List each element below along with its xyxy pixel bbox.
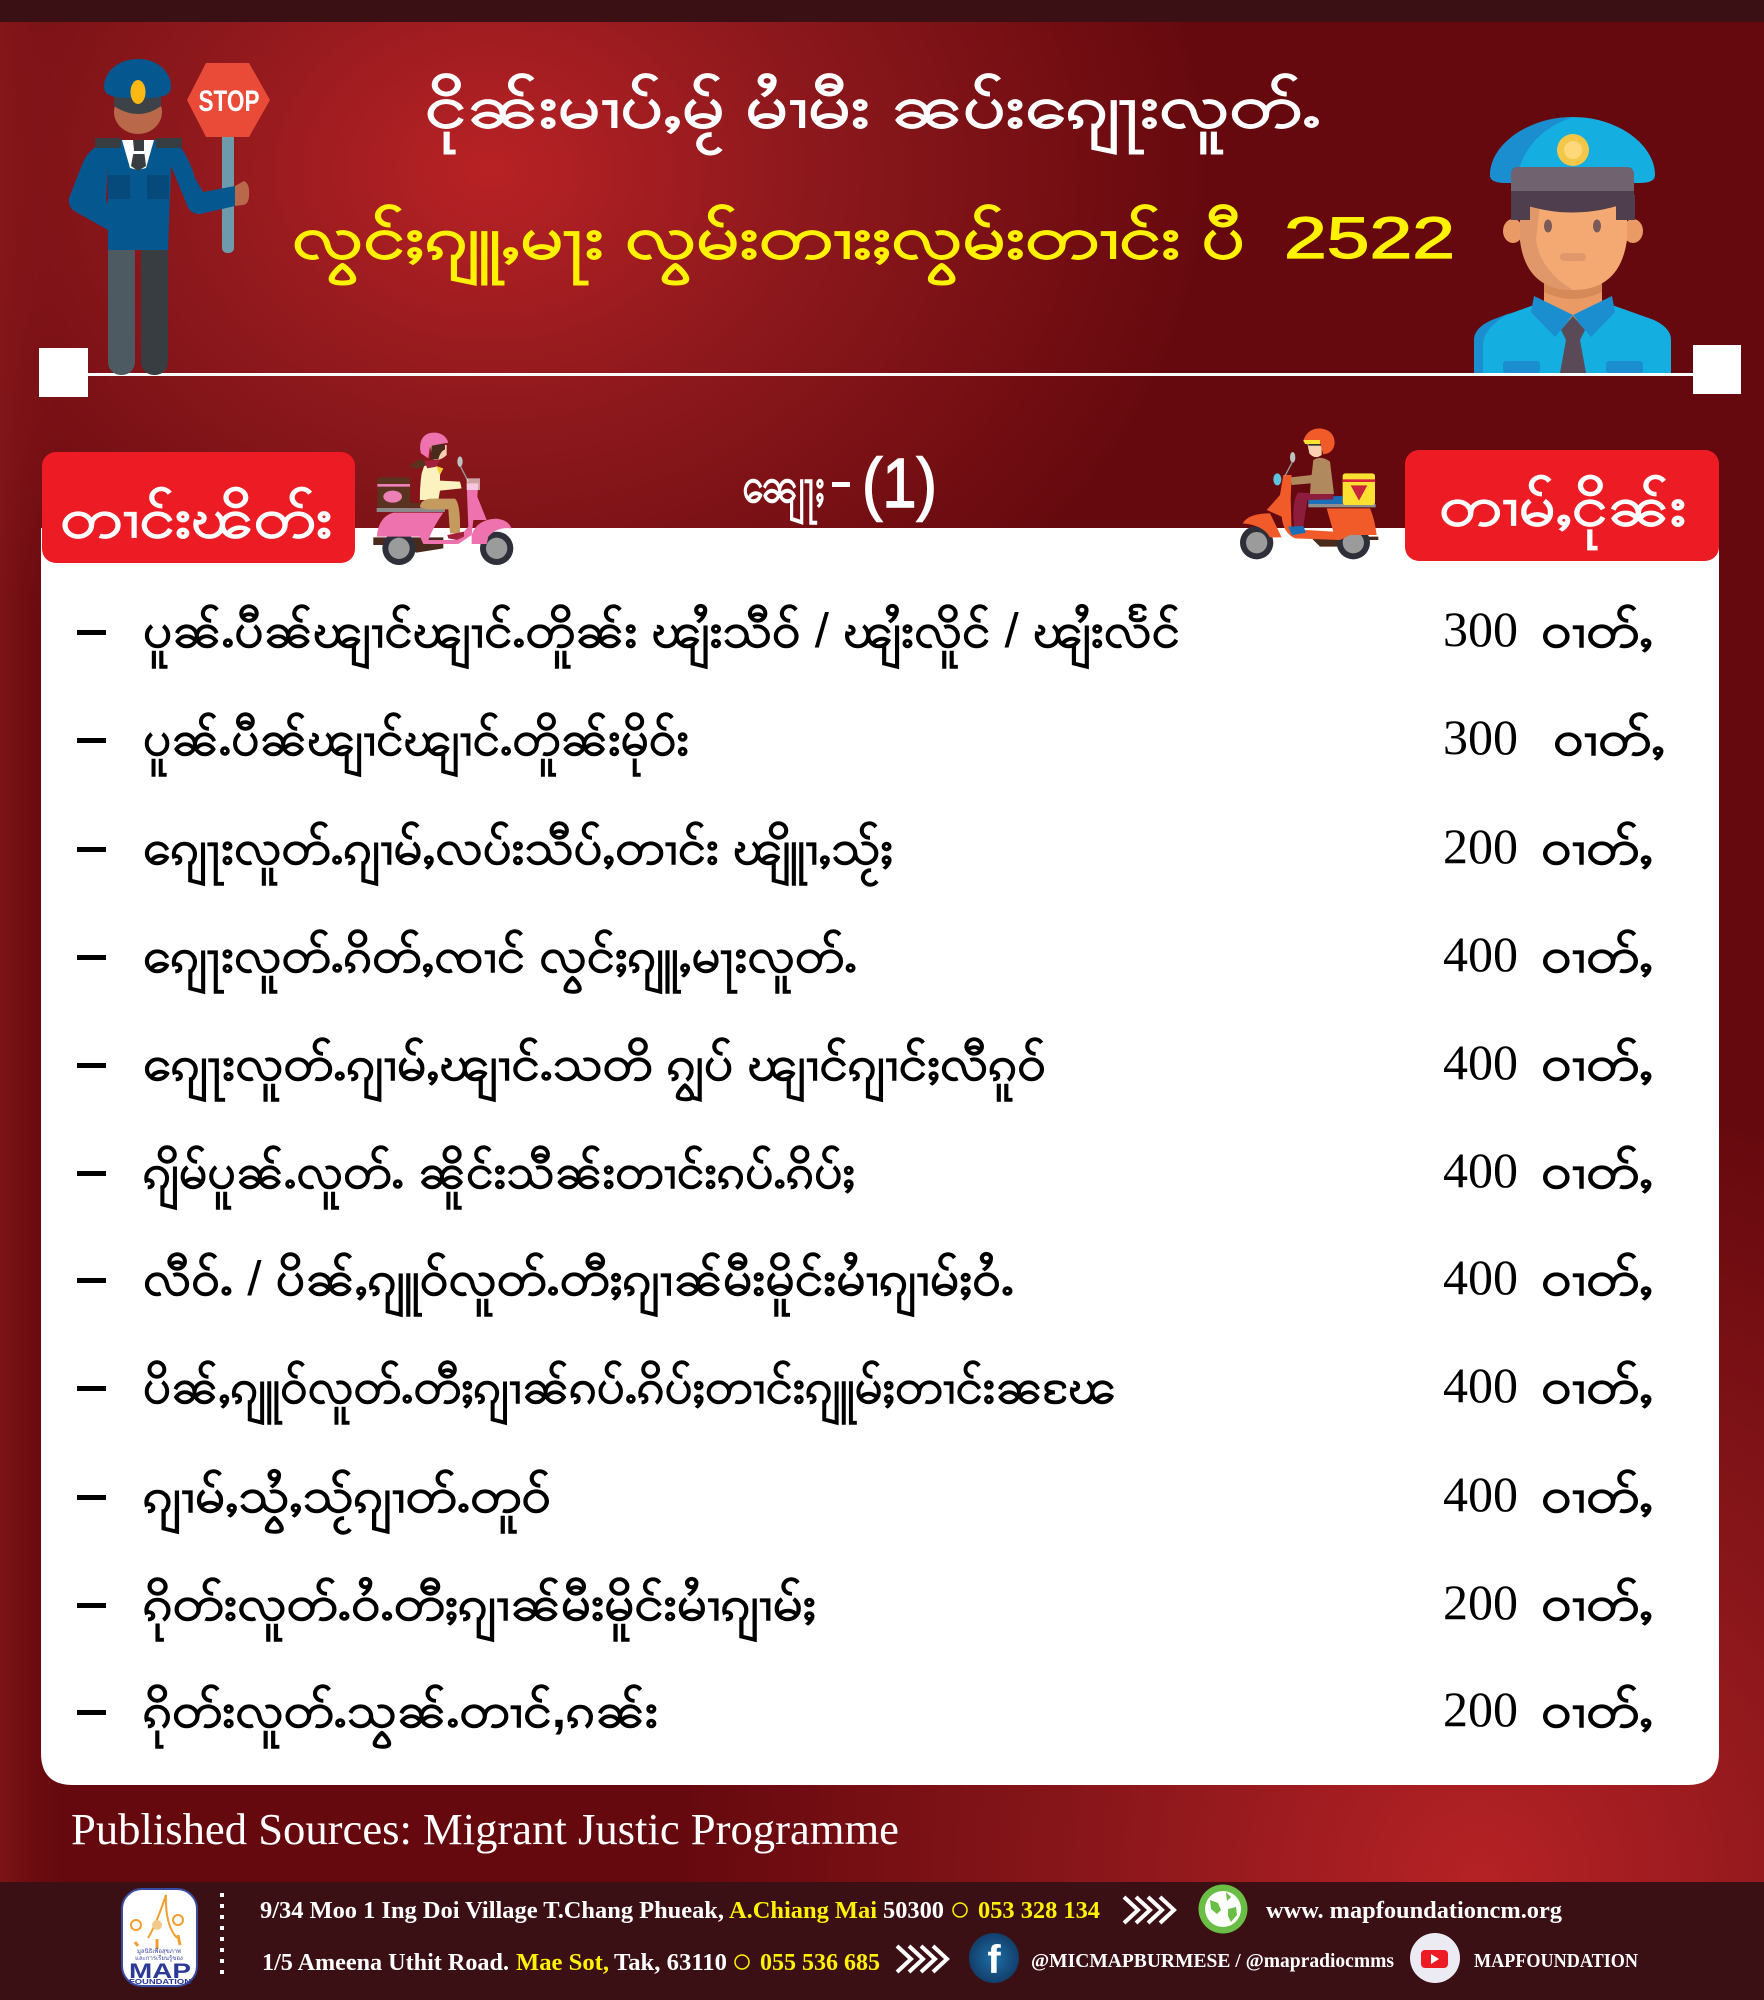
row 8: 400 bbox=[1443, 1357, 1518, 1413]
icon: MAP Foundation logo: มูลนิธิเพื่อสุขภาพ bbox=[137, 1947, 181, 1955]
row 5 bbox=[77, 1034, 1653, 1104]
row 9: ဝၢတ်ႇ bbox=[1541, 1467, 1653, 1523]
row 6: 400 bbox=[1443, 1142, 1518, 1198]
icon: MAP Foundation logo: MAP bbox=[129, 1960, 191, 1983]
address line 1: 9/34 Moo 1 Ing Doi Village T.Chang Phueak, bbox=[260, 1898, 724, 1924]
row 11: ၵိုတ်းလူတ်ႉသွၼ်ႉတၢင်,ၵၼ်း bbox=[143, 1682, 658, 1750]
icon: facebook bbox=[969, 1933, 1019, 1983]
footer band bbox=[0, 1882, 1764, 2000]
page number heading: ၼျေႃႈ bbox=[742, 457, 825, 526]
row 7: လီဝ်ႉ / ပိၼ်ႇၵျူဝ်လူတ်ႉတီႈၵျၢၼ်မီးမိူင်းမႆၢၵျၢမ်ႈဝႆႉ bbox=[143, 1250, 1014, 1318]
youtube channel: MAPFOUNDATION bbox=[1474, 1950, 1638, 1972]
row 4 bbox=[77, 926, 1653, 995]
row 1 bbox=[77, 601, 1653, 670]
website: www. mapfoundationcm.org bbox=[1266, 1898, 1562, 1924]
row 6 bbox=[77, 1142, 1653, 1211]
title line 2: လွင်ႈၵျူႇမႃး လွမ်းတၢးႈလွမ်းတၢင်း ပီ bbox=[292, 203, 1245, 286]
row 7: 400 bbox=[1443, 1249, 1518, 1305]
icon: facebook: f bbox=[987, 1938, 1001, 1982]
tab: offence heading: တၢင်းၽိတ်း bbox=[60, 486, 332, 549]
row 5: 400 bbox=[1443, 1034, 1518, 1090]
icon: pink delivery scooter bbox=[373, 433, 513, 565]
address line 1: 053 328 134 bbox=[978, 1898, 1100, 1924]
row 3: ဝၢတ်ႇ bbox=[1541, 819, 1653, 875]
icon: traffic officer with stop sign: STOP bbox=[198, 85, 260, 118]
row 10: ၵိုတ်းလူတ်ႉဝႆႉတီႈၵျၢၼ်မီးမိူင်းမႆၢၵျၢမ်ႈ bbox=[143, 1575, 816, 1643]
row 4: 400 bbox=[1443, 926, 1518, 982]
row 11: ဝၢတ်ႇ bbox=[1541, 1682, 1653, 1738]
row 7 bbox=[77, 1249, 1653, 1318]
page number heading: (1) bbox=[862, 444, 937, 522]
row 8: ပိၼ်ႇၵျူဝ်လူတ်ႉတီႈၵျၢၼ်ၵပ်ႉၵိပ်ႈတၢင်းၵျူမ်ႈတၢင်းၼၽႄ bbox=[143, 1358, 1116, 1426]
row 11: 200 bbox=[1443, 1681, 1518, 1737]
row 2 bbox=[77, 709, 1665, 778]
row 9: 400 bbox=[1443, 1466, 1518, 1522]
row 8: ဝၢတ်ႇ bbox=[1541, 1358, 1653, 1414]
address line 1: A.Chiang Mai bbox=[729, 1898, 877, 1924]
source note: Published Sources: Migrant Justic Programme bbox=[71, 1805, 899, 1854]
title line 2 bbox=[292, 203, 1455, 286]
row 6: ဝၢတ်ႇ bbox=[1541, 1143, 1653, 1199]
address line 2: 055 536 685 bbox=[760, 1950, 880, 1976]
icon: MAP Foundation logo: FOUNDATION bbox=[129, 1979, 191, 1986]
row 5: ဝၢတ်ႇ bbox=[1541, 1035, 1653, 1091]
icon: MAP Foundation logo bbox=[122, 1889, 197, 1986]
row 9 bbox=[77, 1466, 1653, 1535]
address line 2 bbox=[262, 1950, 880, 1976]
address line 2: Mae Sot, bbox=[516, 1950, 609, 1976]
row 3 bbox=[77, 818, 1653, 887]
row 1: ဝၢတ်ႇ bbox=[1541, 602, 1653, 658]
row 2: ဝၢတ်ႇ bbox=[1553, 710, 1665, 766]
row 3: ၵျေႃးလူတ်ႉၵျၢမ်ႇလပ်းသီပ်ႇတၢင်း ၽျိူၢႇသႂ်ႈ bbox=[143, 819, 893, 887]
tab: offence heading bbox=[42, 452, 355, 563]
row 2: ပူၼ်ႉပီၼ်ၽျၢင်ၽျၢင်ႉတိူၼ်းမိုဝ်း bbox=[143, 710, 689, 778]
icon: youtube bbox=[1410, 1933, 1460, 1983]
row 9: ၵျၢမ်ႇသွႆႇသႂ်ၵျၢတ်ႉတူဝ် bbox=[143, 1467, 551, 1535]
tab: fine amount heading: တၢမ်ႇငိုၼ်း bbox=[1439, 474, 1686, 550]
row 4: ဝၢတ်ႇ bbox=[1541, 927, 1653, 983]
row 10: ဝၢတ်ႇ bbox=[1541, 1575, 1653, 1631]
arrow: chevrons row 2 bbox=[897, 1946, 947, 1972]
row 8 bbox=[77, 1357, 1653, 1426]
row 1: 300 bbox=[1443, 601, 1518, 657]
row 10: 200 bbox=[1443, 1574, 1518, 1630]
facebook handles: @MICMAPBURMESE / @mapradiocmms bbox=[1031, 1950, 1394, 1972]
row 4: ၵျေႃးလူတ်ႉၵိတ်ႇၸၢင် လွင်ႈၵျူႇမႃးလူတ်ႉ bbox=[143, 927, 857, 995]
row 7: ဝၢတ်ႇ bbox=[1541, 1250, 1653, 1306]
icon: globe bbox=[1198, 1884, 1248, 1934]
tab: fine amount heading bbox=[1405, 450, 1719, 561]
page number heading bbox=[742, 444, 937, 526]
header rule with squares bbox=[39, 345, 1741, 397]
icon: orange delivery scooter bbox=[1240, 428, 1378, 559]
panel: fines list bbox=[41, 444, 1719, 1785]
row 3: 200 bbox=[1443, 818, 1518, 874]
row 11 bbox=[77, 1681, 1653, 1750]
icon: traffic officer with stop sign bbox=[69, 59, 270, 375]
row 5: ၵျေႃးလူတ်ႉၵျၢမ်ႇၽျၢင်ႉသတိ ၵျွပ် ၽျၢင်ၵျၢင်ႈလီၵူဝ် bbox=[143, 1035, 1046, 1104]
title line 2: 2522 bbox=[1284, 206, 1455, 271]
icon: police officer portrait bbox=[1474, 117, 1671, 373]
row 1: ပူၼ်ႉပီၼ်ၽျၢင်ၽျၢင်ႉတိူၼ်း ၽျႆးသီဝ် / ၽျႆးလိူင် / ၽျႆးလႅင် bbox=[143, 602, 1180, 670]
address line 1 bbox=[260, 1898, 1100, 1924]
arrow: chevrons row 1 bbox=[1124, 1897, 1174, 1923]
address line 2: Tak, 63110 bbox=[614, 1950, 727, 1976]
row 10 bbox=[77, 1574, 1653, 1643]
address line 2: 1/5 Ameena Uthit Road. bbox=[262, 1950, 509, 1976]
address line 1: 50300 bbox=[883, 1898, 944, 1924]
top band bbox=[0, 0, 1764, 22]
row 6: ၵျိမ်ပူၼ်ႉလူတ်ႉ ၼိူင်းသီၼ်းတၢင်းၵပ်ႉၵိပ်ႈ bbox=[143, 1143, 855, 1211]
title line 1: ငိုၼ်းမၢပ်ႇမႂ် မႆၢမီး ၼပ်းၵျေႃးလူတ်ႉ bbox=[425, 72, 1321, 155]
row 2: 300 bbox=[1443, 709, 1518, 765]
icon: MAP Foundation logo: และการเรียนรู้ของ bbox=[135, 1954, 183, 1962]
